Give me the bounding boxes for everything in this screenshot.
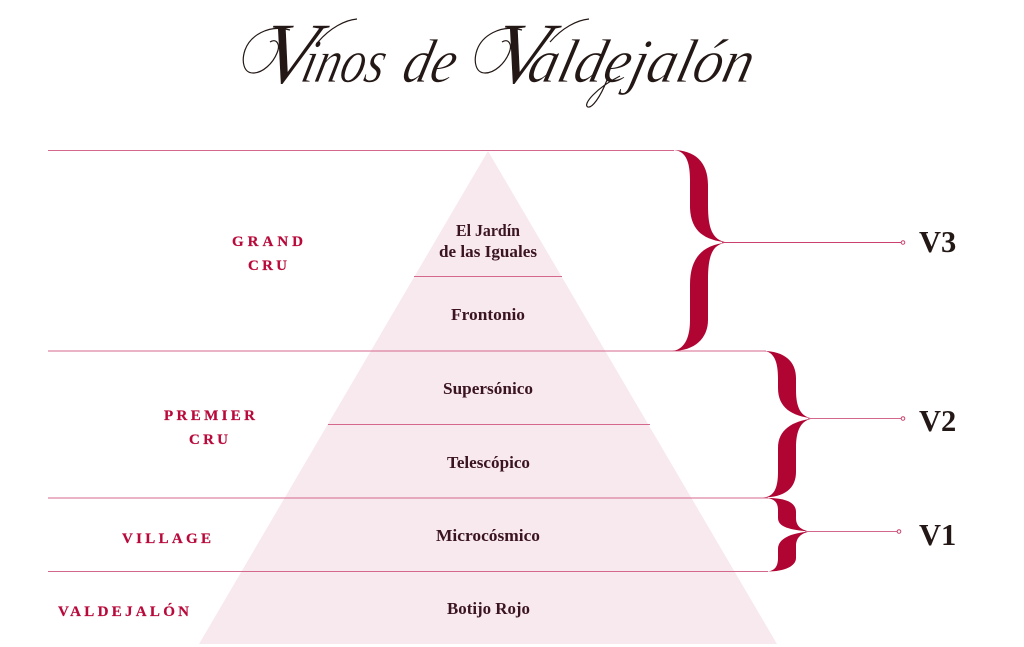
title: V [487,6,566,103]
title: aldejalón [522,27,763,96]
wine names: de las Iguales [439,242,538,261]
tier labels: VILLAGE [122,531,211,547]
title [243,6,763,107]
title: inos [296,27,395,96]
label V2: V2 [919,404,956,438]
wine names: Frontonio [451,305,525,324]
label V1: V1 [919,518,956,552]
tier labels [58,234,303,620]
wine names: Microcósmico [436,526,540,545]
tier labels: CRU [248,258,287,274]
wine names: El Jardín [456,221,520,240]
tier labels: GRAND [232,234,303,250]
brace V3 [672,150,905,351]
label V3: V3 [919,225,956,259]
title: de [397,27,466,96]
title: V [255,6,334,103]
wine names: Telescópico [447,453,530,472]
wine names: Botijo Rojo [447,599,530,618]
wine names [436,221,540,618]
tier labels: PREMIER [164,408,255,424]
tier labels: CRU [189,432,228,448]
brace V2 [763,351,905,498]
tier labels: VALDEJALÓN [58,603,189,620]
pyramid [199,151,777,644]
brace V1 [767,498,901,572]
wine names: Supersónico [443,379,533,398]
